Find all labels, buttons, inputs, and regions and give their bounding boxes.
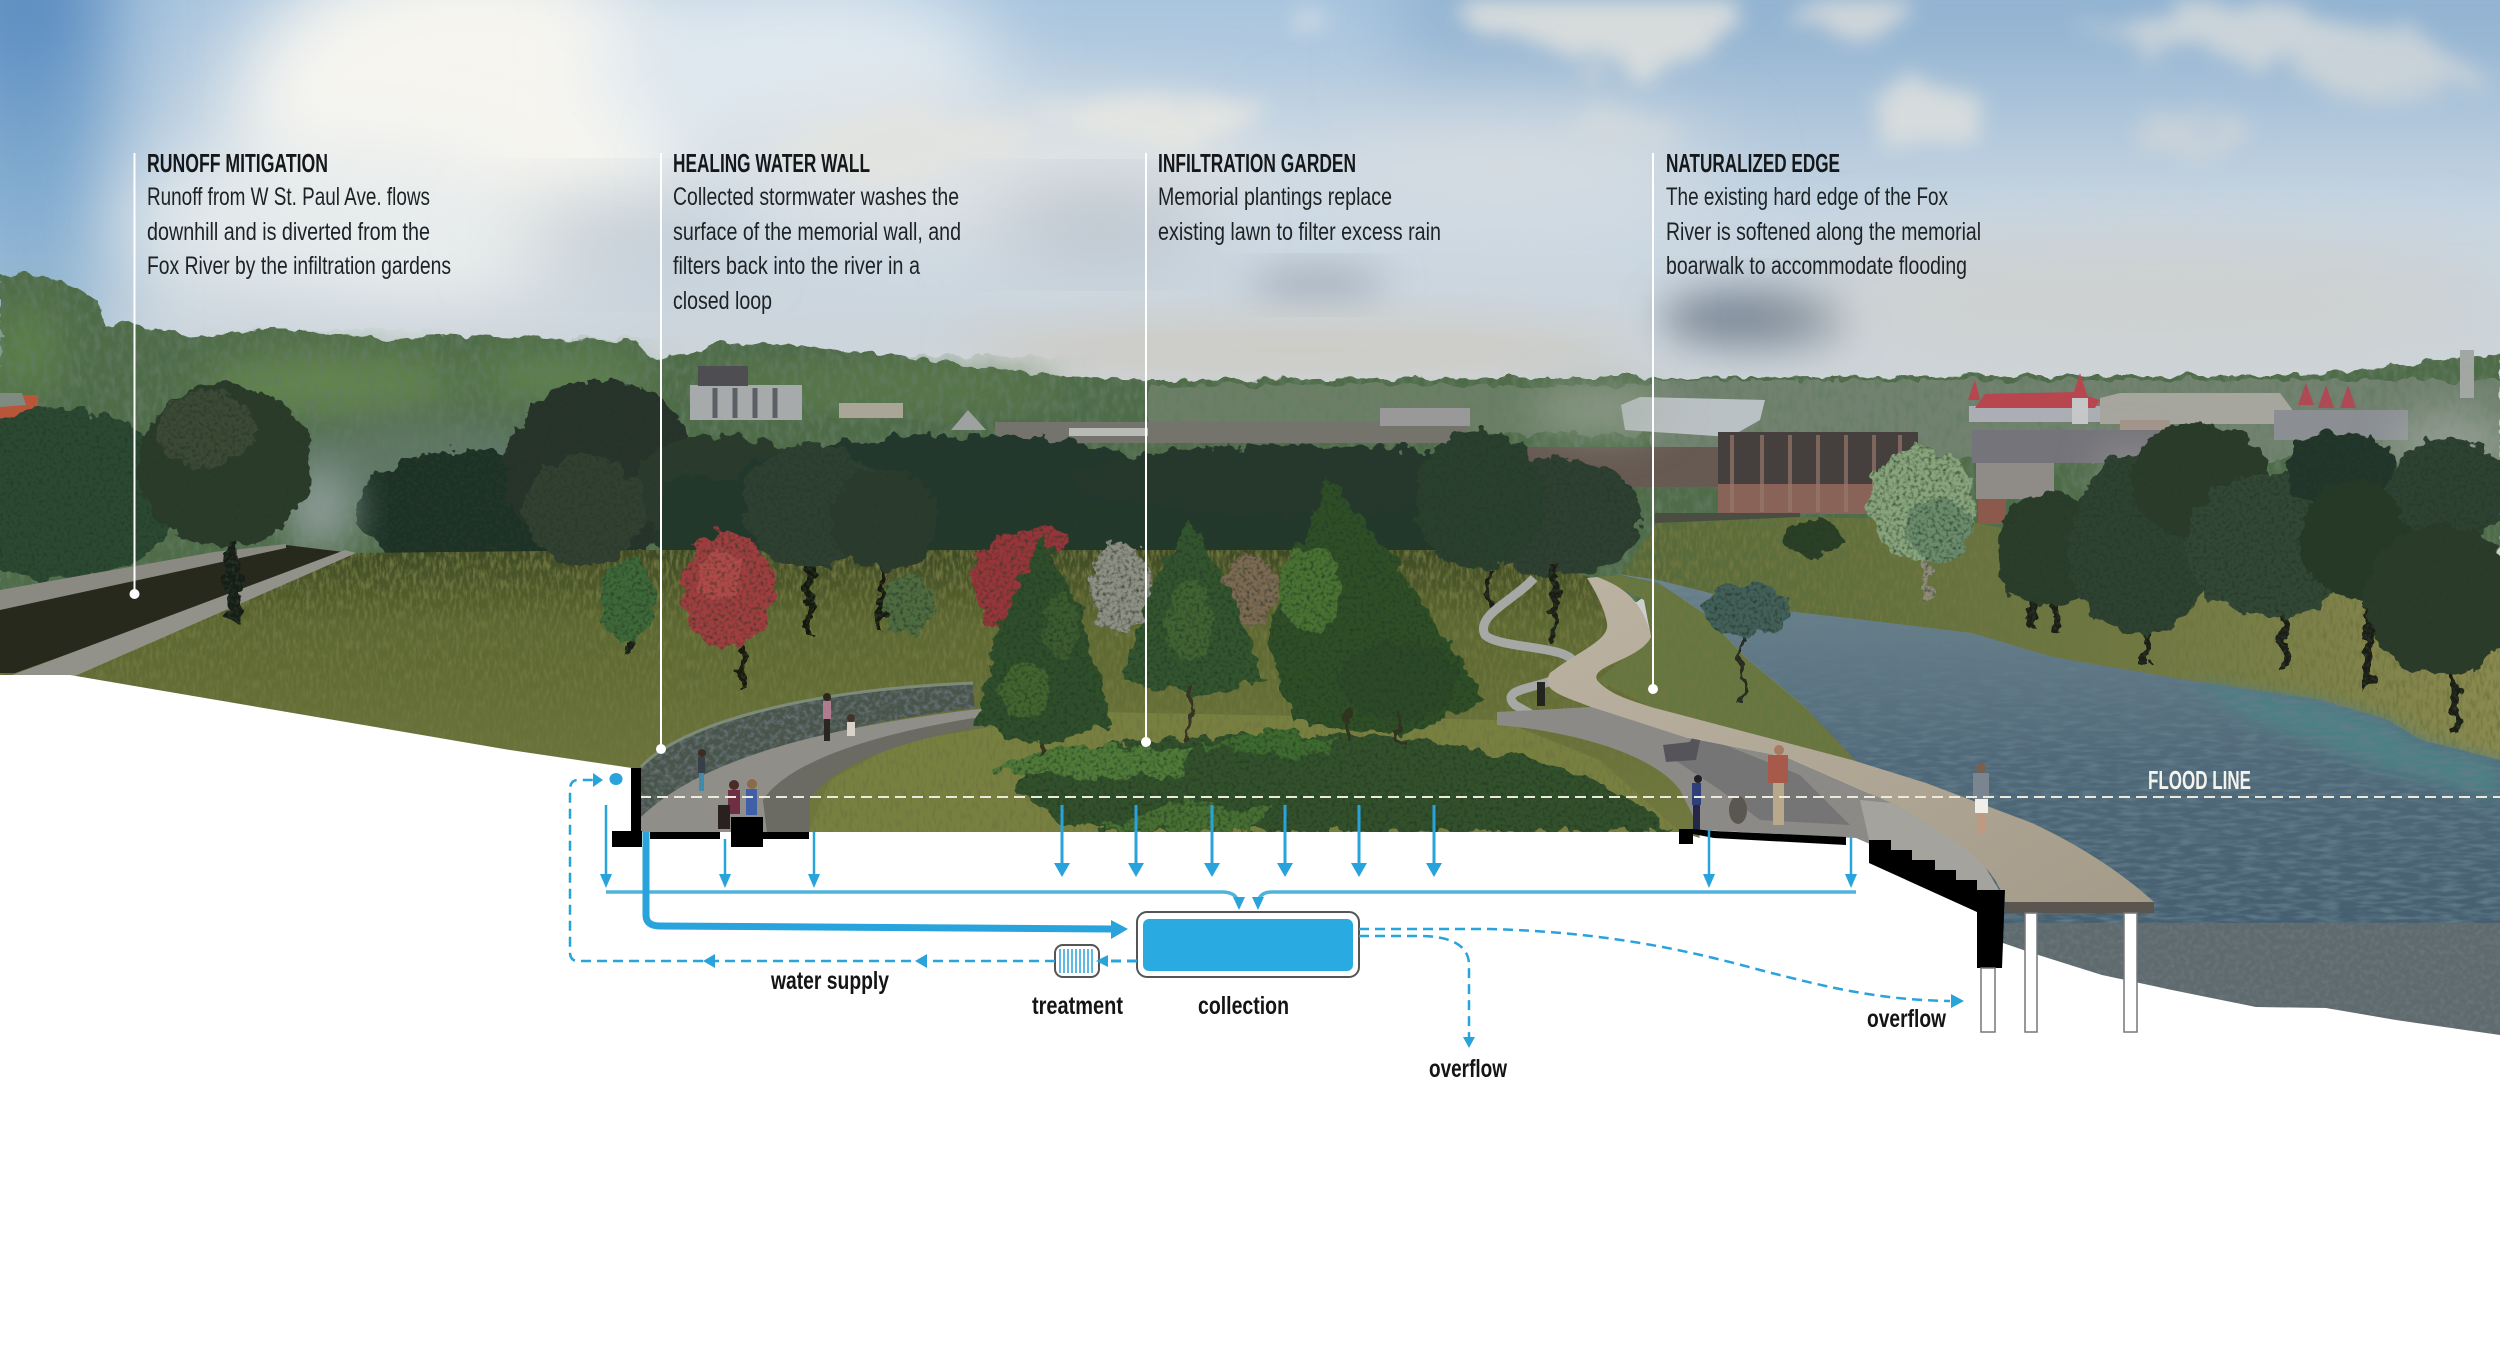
- text: healing water wall: [673, 148, 961, 315]
- steps: [1860, 800, 2005, 900]
- river water: [1611, 573, 2500, 1040]
- bank bush: [1786, 520, 1840, 556]
- wall source dot: [610, 773, 622, 785]
- leader lines and dots: [130, 153, 1658, 754]
- label: treatment: treatment: [1032, 992, 1124, 1020]
- campus building: [690, 366, 802, 420]
- person standing at wall: [823, 693, 831, 741]
- label: water supply: water supply: [770, 967, 889, 995]
- collection tank: [1137, 912, 1359, 977]
- overflow down: [1359, 936, 1475, 1048]
- infiltration garden planting: [809, 712, 1680, 832]
- text: runoff mitigation: Runoff from W St. Paul Ave. flows: [147, 183, 430, 211]
- text: healing water wall: HEALING WATER WALL: [673, 148, 870, 178]
- people: [698, 682, 1989, 834]
- seated couple: [718, 779, 757, 829]
- foreground conifers: [976, 480, 1486, 758]
- background trees: [139, 383, 2500, 733]
- curved boardwalk: [1547, 577, 2154, 902]
- text: infiltration garden: Memorial plantings replace: [1158, 183, 1392, 211]
- text: runoff mitigation: Fox River by the infiltration gardens: [147, 252, 451, 280]
- label: flood line: FLOOD LINE: [2148, 765, 2251, 795]
- clouds: [770, 0, 2490, 175]
- conifer A: [976, 535, 1112, 758]
- person with child: [1692, 775, 1702, 830]
- label: overflow down: overflow: [1429, 1055, 1507, 1083]
- person at wall left: [698, 749, 706, 791]
- river bank: [1620, 517, 2500, 780]
- text: naturalized edge: River is softened along the memorial: [1666, 218, 1981, 246]
- right walkway: [1497, 707, 2005, 900]
- label: collection: collection: [1198, 992, 1289, 1020]
- tree group: mid dark trees: [525, 430, 1640, 640]
- winding path: [1483, 578, 1573, 722]
- distant buildings and town: [0, 350, 2474, 524]
- road with paths: [0, 544, 356, 676]
- label: overflow river: overflow: [1867, 1005, 1946, 1033]
- bench on walkway: [1663, 720, 1704, 762]
- overflow to river: [1359, 929, 1964, 1008]
- mist at end of road: [286, 466, 354, 554]
- downward arrows right: [1703, 830, 1857, 888]
- submerged rocks: [2000, 923, 2500, 1040]
- text: naturalized edge: [1666, 148, 1981, 280]
- red towers: [2298, 383, 2356, 408]
- brick townhouses: [1504, 432, 1918, 523]
- text: runoff mitigation: downhill and is diverted from the: [147, 218, 430, 246]
- small green tree: [600, 562, 656, 660]
- garden dark plantings: [990, 728, 1672, 832]
- text: runoff mitigation: [147, 148, 451, 280]
- text: infiltration garden: existing lawn to filter excess rain: [1158, 218, 1441, 246]
- memorial wall: [641, 683, 975, 817]
- child on bench: [847, 714, 855, 736]
- red tree 2: [975, 524, 1068, 630]
- clock tower: [2460, 350, 2474, 398]
- collector arrow heads: [1233, 897, 1264, 910]
- town mist: [1530, 382, 2500, 495]
- white section cut ground: [0, 675, 2500, 1354]
- text: naturalized edge: NATURALIZED EDGE: [1666, 148, 1840, 178]
- central buildings: [839, 403, 1470, 443]
- pink tree: [1224, 554, 1276, 626]
- water supply dashed line: [570, 773, 1137, 968]
- treatment filter: [1055, 945, 1099, 977]
- tree: large dark tree: [139, 383, 311, 623]
- text: healing water wall: Collected stormwater washes the: [673, 183, 959, 211]
- text: naturalized edge: boarwalk to accommodate flooding: [1666, 252, 1967, 280]
- grass between path and river: [1597, 575, 1860, 765]
- dark tree band: [0, 380, 1530, 580]
- small tree on river bank: [1704, 584, 1788, 707]
- boardwalk slab edge: [2005, 902, 2154, 913]
- curved bench: [763, 712, 1015, 832]
- curved walkway: [641, 705, 1015, 832]
- man on upper path: [1537, 682, 1545, 706]
- dog: [1729, 796, 1747, 824]
- conifer C: [1270, 480, 1486, 745]
- man on boardwalk: [1973, 763, 1989, 834]
- bush near trees: [883, 575, 935, 635]
- collector pipe: [606, 892, 1856, 902]
- conifer B: [1122, 515, 1265, 740]
- lawn: [0, 550, 1700, 840]
- thick wall return arrow: [646, 832, 1128, 939]
- infiltration arrows: [1054, 805, 1442, 877]
- right side forest: [1998, 422, 2500, 733]
- text: infiltration garden: [1158, 148, 1441, 246]
- text: infiltration garden: INFILTRATION GARDEN: [1158, 148, 1356, 178]
- text: healing water wall: filters back into the river in a: [673, 252, 920, 280]
- text: runoff mitigation: RUNOFF MITIGATION: [147, 148, 328, 178]
- water diagram: [570, 773, 1964, 1048]
- far hillside tree line: [0, 273, 2500, 600]
- text: naturalized edge: The existing hard edge of the Fox: [1666, 183, 1948, 211]
- red barn: [0, 393, 38, 443]
- text: healing water wall: closed loop: [673, 287, 772, 315]
- concrete section cut: [612, 768, 2005, 968]
- flood line: [640, 796, 2500, 798]
- red tree 1: [681, 532, 773, 688]
- red-roofed castle: [1968, 373, 2100, 424]
- text: healing water wall: surface of the memorial wall, and: [673, 218, 961, 246]
- houses: [1972, 430, 2160, 524]
- white modern building: [1621, 397, 1765, 437]
- sky background: [0, 0, 2500, 720]
- piles: [1981, 913, 2137, 1032]
- walking man: [1768, 745, 1788, 825]
- white flowering tree: [1088, 544, 1152, 632]
- grey long building: [2100, 393, 2294, 434]
- pale tree on far bank: [1869, 447, 1973, 600]
- lower grey block: [2274, 410, 2408, 440]
- downward arrows left: [600, 805, 820, 888]
